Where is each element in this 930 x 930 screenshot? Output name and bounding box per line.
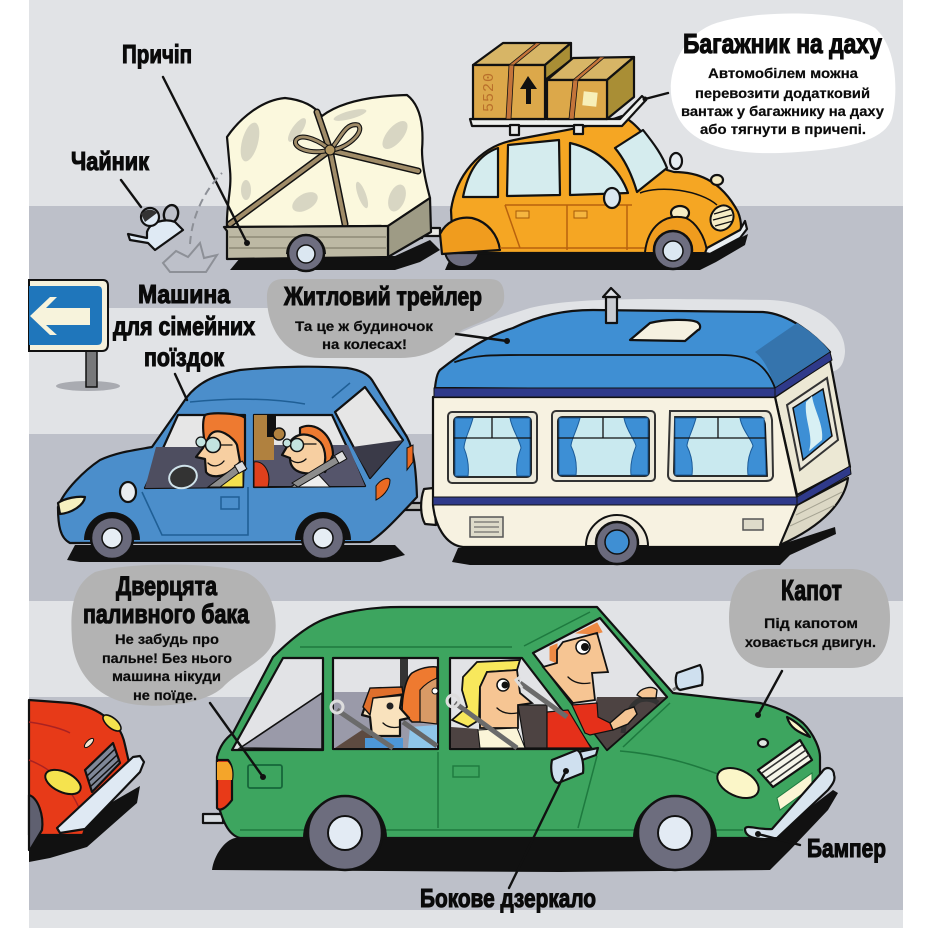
back window (232, 658, 323, 750)
end window (787, 378, 838, 470)
skylight (630, 320, 700, 341)
red bonnet line (29, 722, 84, 822)
woman face (480, 670, 532, 728)
bumper leader (755, 831, 800, 845)
fuel door body text: машина нікуди (112, 668, 221, 684)
family car leader (175, 374, 187, 400)
caravan body text (295, 318, 434, 352)
rear window (463, 148, 498, 197)
bubble body text: або тягнути в причепі. (700, 121, 866, 137)
rear wheel (303, 796, 387, 838)
bubble: bonnet (729, 569, 890, 668)
green body (217, 607, 820, 838)
label: kettle: Чайник (71, 146, 150, 176)
window one (448, 412, 537, 483)
rear lamps (407, 445, 413, 470)
front wheel (633, 796, 717, 838)
front wheel (84, 512, 140, 540)
bonnet leader (755, 671, 782, 718)
left arrow (30, 297, 90, 335)
driver (167, 413, 247, 491)
caravan leader (456, 334, 510, 344)
rear bumper (203, 814, 223, 823)
up arrow (520, 76, 537, 104)
car body (58, 367, 417, 543)
door lines (142, 487, 248, 535)
side mirror leader (509, 768, 569, 888)
side mirror (120, 482, 136, 502)
fuel door leader (210, 703, 266, 780)
bonnet crease (640, 189, 717, 205)
bubble heading: Багажник на даху (683, 28, 882, 59)
tow bar (412, 228, 440, 236)
front fender (645, 217, 707, 252)
label: side mirror: Бокове дзеркало (420, 883, 596, 913)
load under cloth (227, 95, 430, 227)
driver shirt through window (547, 710, 591, 748)
luggage boxes (473, 43, 634, 119)
green bumper (745, 768, 835, 839)
front bumper (705, 221, 747, 254)
kettle leader (121, 180, 141, 207)
number plate (777, 773, 812, 810)
fuel door heading (83, 571, 250, 629)
green grille (758, 740, 812, 787)
passenger (282, 426, 347, 487)
fuel door (248, 765, 282, 788)
green car (203, 607, 838, 872)
driver face (543, 633, 608, 703)
bubble: fuel door (71, 564, 276, 706)
label: trailer: Причіп (122, 39, 192, 69)
red headlamps (42, 765, 84, 799)
label: family car: Машина (138, 279, 230, 309)
driver hands (610, 707, 637, 730)
box two (547, 57, 634, 80)
green car shadow (212, 790, 838, 872)
bubble body text (681, 65, 884, 137)
sign post (86, 350, 97, 387)
seat belts (455, 703, 517, 748)
fuel door body text: Не забудь про (115, 631, 219, 647)
roof rack leader (642, 93, 668, 102)
headlamps (671, 206, 689, 220)
bubble body text: вантаж у багажнику на даху (681, 103, 884, 119)
car shadow (445, 234, 748, 270)
sign shadow (56, 381, 120, 391)
grille vents (470, 517, 503, 537)
trailer with load (224, 95, 440, 271)
steering wheel (167, 463, 199, 491)
kettle (128, 203, 183, 250)
driver shirt (572, 703, 613, 735)
trailer shadow (230, 240, 440, 270)
blue family car (58, 367, 422, 562)
woman collar (478, 728, 525, 748)
sign plate (29, 280, 108, 351)
body lines (240, 612, 745, 830)
bonnet body text: ховається двигун. (745, 634, 876, 650)
green headlamps (713, 762, 763, 804)
caravan (421, 288, 851, 565)
bubble: roof rack (671, 13, 895, 153)
door details (500, 205, 655, 250)
chimney vent (603, 288, 620, 323)
fuel door heading: Дверцята (116, 571, 218, 601)
label: bumper: Бампер (807, 833, 886, 863)
caravan hitch (421, 488, 436, 525)
label: family car: для сімейних (113, 311, 255, 341)
caravan body text: на колесах! (322, 336, 407, 352)
bubble body text: Автомобілем можна (708, 65, 858, 81)
rear side window (254, 415, 365, 487)
bubble: caravan (267, 279, 504, 358)
bonnet body text (745, 615, 876, 650)
rear wheel (445, 233, 479, 267)
woman jacket (518, 705, 547, 748)
road sign (29, 280, 120, 391)
label: family car (113, 279, 255, 372)
middle window (507, 140, 560, 196)
trailer leader (163, 77, 250, 246)
red car shadow (29, 786, 140, 862)
roof rack (470, 96, 646, 126)
caravan roof (435, 310, 830, 390)
rear wheel (295, 512, 351, 540)
fuel door heading: паливного бака (83, 599, 250, 629)
navy stripes (433, 352, 851, 505)
windscreen (615, 130, 667, 192)
front wheel (654, 231, 692, 269)
tail lamp (217, 760, 233, 810)
grille (706, 201, 738, 235)
window two (552, 411, 655, 481)
caravan body (433, 397, 797, 547)
bonnet body text: Під капотом (764, 615, 858, 631)
window three (668, 411, 773, 481)
box label (582, 91, 598, 107)
fuel door body text: пальне! Без нього (102, 650, 232, 666)
rear passenger man (331, 687, 409, 748)
headlamp (58, 497, 85, 514)
front windscreen and door window (145, 415, 245, 488)
caravan body text: Та це ж будиночок (295, 318, 434, 334)
child passenger (254, 415, 285, 487)
red bumper (57, 756, 144, 833)
straps (506, 43, 541, 119)
box one (473, 43, 571, 65)
middle window (331, 658, 438, 749)
side mirror (551, 748, 598, 783)
fuel door body text (102, 631, 232, 703)
bubble body text: перевозити додатковий (695, 85, 870, 101)
front passenger window (447, 658, 592, 749)
caravan shadow (452, 527, 836, 565)
front window (570, 143, 628, 195)
rear window (335, 387, 403, 478)
car body (451, 116, 741, 253)
rear passenger woman (402, 667, 438, 748)
yellow car (440, 96, 748, 270)
windscreen and driver (533, 618, 667, 750)
car shadow (67, 545, 405, 562)
trailer box (224, 226, 388, 259)
end lower panel (780, 478, 848, 545)
caravan heading: Житловий трейлер (283, 281, 482, 311)
red grille (85, 743, 120, 792)
side mirror (604, 188, 620, 208)
end panel (775, 360, 850, 495)
steering wheel (623, 699, 658, 733)
red car body (29, 700, 130, 835)
wheel arch and wheel (586, 515, 648, 546)
driver hair (550, 623, 602, 663)
falling path and bang (163, 173, 222, 272)
tow hitch (396, 503, 422, 510)
trailer wheel (286, 234, 326, 254)
label: family car: поїздок (144, 342, 225, 372)
box number: 5520 (481, 73, 498, 112)
trailer side (388, 198, 431, 257)
red car wheel (29, 795, 42, 850)
blonde hair (452, 660, 520, 727)
red car (29, 700, 144, 862)
rear fender (440, 218, 500, 254)
cloth shading (237, 107, 412, 216)
ropes (230, 112, 418, 224)
fuel door body text: не поїде. (133, 687, 197, 703)
wing mirror (673, 665, 703, 690)
bonnet heading: Капот (781, 575, 842, 607)
